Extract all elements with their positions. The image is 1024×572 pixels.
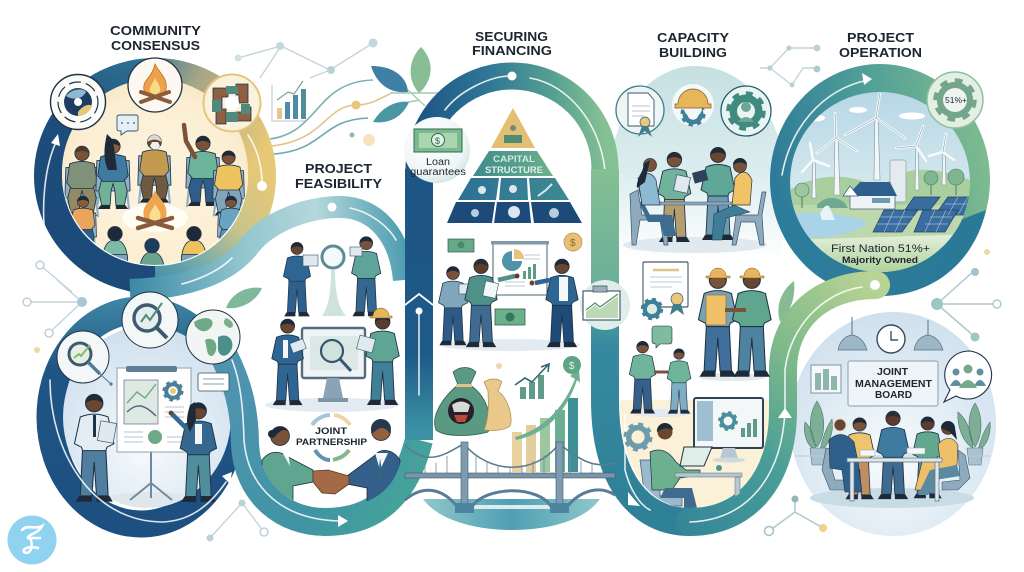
management: board sign: MANAGEMENT [855,379,932,390]
kids handshake [629,326,692,417]
chart icon on path [580,280,630,330]
presenter man [74,394,117,502]
ring: project feasibility assessment [50,310,232,524]
gear icon 51%: 51%+ [945,96,967,105]
management: meeting table and people [810,411,974,508]
certificate gear medal [642,262,688,319]
feature titles: FEASIBILITY [295,176,382,191]
ring arrows community [44,134,267,250]
feature titles: PROJECT [305,161,372,176]
joint partnership badge and handshake [262,415,400,505]
feasibility ring icon: magnifier with trend [57,331,113,386]
ring icon: linked hands [204,74,260,132]
panel: capacity building arch [612,66,782,260]
bridge [405,442,615,530]
feature titles: SECURING [475,29,548,44]
rising bars and arrow [496,356,581,472]
U path: feasibility to financing [218,345,419,522]
feasibility: magnifier lens with team [283,237,381,316]
loan guarantees badge: guarantees [410,167,466,178]
capital structure pyramid [447,108,582,223]
chart: small rising bars [272,81,306,121]
cream background for workstation [620,400,770,508]
gear icon 51% [927,72,983,128]
feature titles [110,23,922,191]
management: lamps and clock [838,317,943,353]
feasibility ring icon: magnifier with chart [122,292,178,348]
management: small chart [811,365,841,393]
finance meeting: $ [570,238,576,249]
gear icon small [625,424,651,450]
joint partnership badge and handshake: JOINT [315,426,347,437]
arch dot and arrows [405,72,611,314]
workers handshake [698,268,771,381]
finance meeting [439,233,582,351]
feature titles: BUILDING [659,45,727,60]
logo badge [8,516,56,564]
management: speech bubble with people [944,351,992,402]
ring icon: campfire [128,58,182,112]
capacity icons [616,84,771,137]
loan guarantees badge [404,117,470,183]
panel: joint management board disc [790,312,996,536]
feasibility ring icon: world globe [186,310,240,364]
operation ownership text: First Nation 51%+ [831,243,930,255]
speech bubble [117,115,138,135]
rising bars and arrow: $ [569,361,575,372]
flipchart presentation [100,366,229,512]
ring: community consensus [48,72,262,280]
feature titles: CAPACITY [657,30,729,45]
joint partnership badge and handshake: PARTNERSHIP [296,437,368,448]
U path: capacity building to joint management [605,169,690,522]
flowing lines and branch with leaves [270,47,450,154]
feature titles: COMMUNITY [110,23,201,38]
management: board sign: BOARD [875,390,912,401]
wind farm scene [790,92,970,272]
leaf [226,288,262,308]
leaf near operation [778,281,794,322]
feasibility: monitor review [265,308,399,412]
operation ownership text: Majority Owned [842,255,918,266]
money bags [435,368,511,436]
U path right half [625,280,880,522]
management: board sign: JOINT [877,367,908,378]
feature titles: OPERATION [839,45,922,60]
arrow in lower ring [50,380,232,522]
U arrow [232,360,348,527]
capacity team at table [623,148,767,253]
feature titles: PROJECT [847,30,914,45]
presenter woman [169,402,217,502]
operation ownership text [831,243,930,266]
capital structure pyramid: STRUCTURE [485,165,543,175]
ring: project operation [770,64,990,296]
capital structure pyramid: CAPITAL [493,154,536,164]
loan guarantees badge: $ [435,136,440,146]
flowing teal band toward feasibility [130,202,404,290]
management: board sign [848,361,938,406]
management: plants [795,401,990,465]
feature titles: CONSENSUS [111,38,200,53]
worker at laptop [640,423,742,508]
monitor [694,398,763,462]
column and arch: securing financing [419,76,605,440]
community circle: seated people and fire [64,122,245,265]
ring icon: globe with arrows [50,74,106,130]
loan guarantees badge: Loan [426,157,450,168]
feature titles: FINANCING [472,43,552,58]
